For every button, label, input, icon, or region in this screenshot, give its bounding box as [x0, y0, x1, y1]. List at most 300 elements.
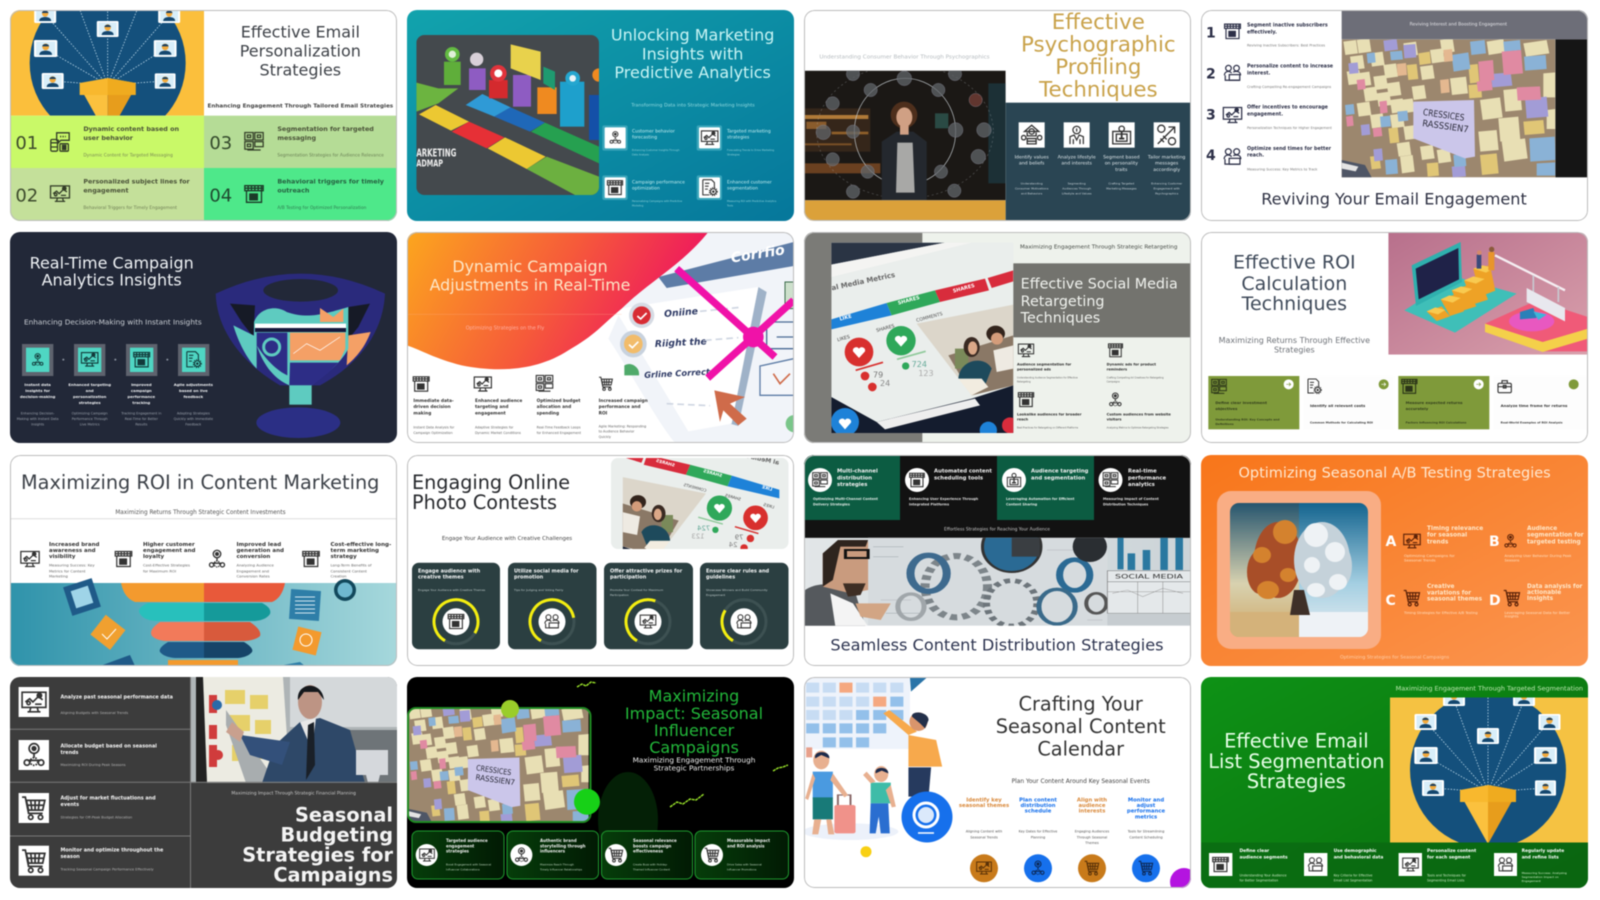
step 1: effectively. — [1247, 29, 1277, 35]
tile: audience targeting: Content Sharing — [1006, 502, 1038, 506]
title: Effective ROI — [1233, 252, 1356, 274]
panel: four steps: Psychographics — [1155, 192, 1179, 196]
insight 3: Results — [135, 422, 148, 426]
tile: automated scheduling: scheduling tools — [934, 475, 983, 481]
contest card 1 — [412, 563, 500, 652]
title: Seasonal Content — [996, 715, 1166, 738]
step: align interests: Align with — [1077, 797, 1107, 803]
dot: yellow — [860, 846, 872, 857]
step: plan distribution: Key Dates for Effective — [1019, 830, 1057, 834]
benefit 3: Engagement and — [236, 568, 270, 573]
card 2: Maximize Reach Through — [540, 862, 574, 866]
budget step 4 — [19, 846, 164, 876]
contest card 1: Engage audience with — [418, 569, 481, 575]
step 2: and behavioral data — [1334, 855, 1383, 861]
step 4: 4 — [1206, 148, 1216, 164]
card: relevant costs: Identify all relevant costs — [1310, 403, 1366, 408]
test B: segmentation for — [1527, 533, 1584, 539]
corner: purple — [1170, 868, 1198, 896]
panel: four steps: Tailor marketing — [1147, 154, 1185, 160]
benefit 2: Cost-Effective Strategies — [143, 563, 190, 568]
insight 4 — [174, 344, 214, 426]
subtitle: Transforming Data into Strategic Marketing Insights — [630, 103, 755, 109]
step: plan distribution — [1019, 797, 1057, 882]
feature: campaign performance optimization — [602, 175, 685, 207]
card 3: Create Buzz with Holiday- — [633, 862, 668, 866]
title: Predictive Analytics — [614, 63, 771, 82]
contest card 3: Offer attractive prizes for — [610, 569, 683, 575]
benefit 1: Measuring Success: Key — [49, 563, 95, 568]
step 3: Tools and Techniques for — [1426, 873, 1467, 877]
item 02: 02 — [15, 185, 38, 206]
image: half autumn half winter tree — [1217, 491, 1381, 649]
step 4: Engagement — [1522, 879, 1542, 883]
card: time frame: Real-World Examples of ROI Analysis — [1501, 420, 1563, 424]
item 1: Immediate data- — [413, 398, 454, 404]
step 4: Optimize send times for better — [1247, 146, 1332, 152]
image: woman with network rings — [804, 65, 1006, 200]
insight 4: feedback — [183, 394, 204, 399]
step 1 — [1206, 23, 1328, 48]
tactic: audience segmentation: Audience segmentation for — [1017, 363, 1072, 367]
title: Seamless Content Distribution Strategies — [830, 636, 1164, 655]
test B: Analyzing User Behavior During Peak — [1504, 554, 1572, 558]
step 3: Personalize content — [1427, 848, 1476, 854]
step 2: interest. — [1247, 70, 1271, 76]
panel: four steps: Segment based — [1103, 154, 1140, 160]
test B: B — [1489, 534, 1500, 550]
image: man in suit at poster — [190, 677, 398, 783]
subtitle: Strategic Partnerships — [654, 764, 735, 773]
test A: A — [1386, 534, 1396, 550]
item 1: Campaign Optimization — [413, 431, 453, 435]
budget step 2: Maximizing ROI During Peak Seasons — [60, 763, 126, 767]
benefit 1: Marketing — [49, 574, 69, 579]
benefit 1: visibility — [49, 554, 76, 560]
contest card 4: Ensure clear rules and — [706, 569, 770, 575]
title: Analytics Insights — [42, 270, 182, 289]
item 2 — [474, 377, 522, 435]
step 2: Use demographic — [1334, 848, 1377, 854]
tile: multi-channel: Optimizing Multi-Channel Content — [813, 497, 878, 501]
step: monitor metrics: Tools for Streamlining — [1127, 830, 1164, 834]
card: expected returns: Factors Influencing ROI Calculations — [1406, 420, 1467, 424]
item 03: messaging — [277, 134, 316, 142]
feature: customer behavior forecasting: forecasting — [632, 135, 657, 141]
step: monitor metrics — [1127, 797, 1165, 882]
card 3: Seasonal relevance — [633, 838, 677, 843]
budget step 3: Adjust for market fluctuations and — [60, 795, 156, 801]
card 4: and ROI analysis — [727, 843, 765, 848]
step 3: 3 — [1206, 108, 1216, 124]
test A: Timing relevance — [1427, 526, 1483, 532]
step: identify themes: Identify key — [966, 797, 1002, 803]
tactic: lookalike audiences: Lookalike audiences for broader — [1017, 412, 1082, 416]
step 1: for Better Segmentation — [1240, 878, 1278, 882]
step: identify themes: seasonal themes — [959, 803, 1009, 809]
item 1: making — [413, 410, 431, 416]
item 4: to Audience Behavior — [599, 430, 635, 434]
step 4 — [1494, 848, 1567, 883]
title: Strategies — [260, 60, 341, 79]
step 3 — [1206, 105, 1333, 130]
step 3 — [1399, 848, 1476, 882]
step: monitor metrics: adjust — [1137, 803, 1156, 809]
tactic: custom audiences: Custom audiences from website — [1107, 412, 1171, 416]
subtitle: Maximizing Impact Through Strategic Financial Planning — [231, 791, 356, 797]
title block: Effective Social Media — [1021, 277, 1178, 293]
title: Strategies — [1247, 770, 1346, 793]
card: define objectives: Understanding ROI: Key Concepts and — [1215, 418, 1280, 422]
item 01: Dynamic content based on — [83, 125, 179, 133]
panel: four steps: on personality — [1105, 161, 1138, 167]
benefit 4: Cost-effective long- — [330, 542, 391, 548]
panel: four steps: and beliefs — [1019, 161, 1045, 167]
card: define objectives: objectives — [1215, 406, 1238, 411]
item 1: Instant Data Analysis for — [413, 426, 455, 430]
step: align interests — [1075, 797, 1109, 882]
subtitle: Maximizing Engagement Through — [633, 755, 755, 764]
title: Profiling — [1055, 55, 1141, 80]
title: Effective Email — [241, 23, 360, 42]
test B: targeted testing — [1527, 539, 1581, 545]
band: gold footer — [804, 200, 1006, 221]
tile: audience targeting: Audience targeting — [1031, 469, 1089, 475]
feature: targeted marketing strategies: Strategies — [727, 152, 740, 156]
panel: Effective Email Personalization Strategies — [10, 0, 397, 221]
panel: Seasonal Budgeting Strategies for Campaigns — [10, 677, 398, 888]
item 2: targeting and — [475, 404, 508, 410]
panel: Maximizing Impact: Seasonal Influencer Campaigns — [407, 677, 794, 888]
subtitle: Maximizing Engagement Through Targeted Segmentation — [1396, 685, 1583, 693]
benefit 2: engagement and — [143, 548, 196, 554]
title: Effective — [1052, 10, 1145, 35]
subtitle: Optimizing Strategies on the Fly — [466, 325, 544, 331]
item 01: 01 — [15, 133, 38, 154]
contest card 2: promotion — [514, 575, 544, 581]
card: relevant costs — [1303, 376, 1394, 429]
title block: Techniques — [1020, 311, 1100, 327]
feature: campaign performance optimization: Modeling — [632, 203, 644, 207]
image: marketing roadmap: ADMAP — [416, 159, 443, 170]
subtitle: Engage Your Audience with Creative Challenges — [442, 536, 572, 542]
budget step 1: Aligning Budgets with Seasonal Trends — [60, 711, 128, 715]
title: Maximizing — [649, 687, 739, 706]
tile: audience targeting: Leveraging Automation for Efficient — [1006, 497, 1075, 501]
item 3: spending — [537, 410, 559, 416]
image: sticky-note wall in green frame — [407, 700, 600, 823]
budget step 1: Analyze past seasonal performance data — [60, 694, 173, 700]
item 04 — [204, 168, 397, 221]
step 3: Personalization Techniques for Higher Engagement — [1247, 126, 1333, 130]
item 3 — [536, 375, 582, 435]
step 4: Measuring Success: Analyzing — [1522, 871, 1567, 875]
insight 1: Insights — [31, 422, 44, 426]
item 03: 03 — [209, 133, 232, 154]
band: grey header: Reviving Interest and Boosting Engagement — [1410, 22, 1507, 28]
panel: four steps: Lifestyle and Values — [1062, 192, 1092, 196]
title: Engaging Online — [412, 471, 570, 494]
contest card 4: Showcase Winners and Build Community — [706, 588, 768, 592]
card 1: Boost Engagement with Seasonal — [446, 862, 491, 866]
item 4: performance and — [599, 404, 640, 410]
budget step 3: Strategies for Off-Peak Budget Allocation — [60, 815, 132, 819]
tactic: audience segmentation — [1017, 344, 1078, 384]
item 04: Behavioral triggers for timely — [277, 177, 385, 185]
card: time frame — [1493, 376, 1588, 429]
feature: enhanced customer segmentation: Enhanced customer — [727, 180, 772, 186]
step: plan distribution: distribution — [1020, 803, 1056, 809]
image: social screen — [611, 424, 789, 593]
test C: C — [1386, 593, 1396, 609]
insight 2: Enhanced targeting — [68, 382, 111, 387]
title: Dynamic Campaign — [452, 257, 608, 276]
tile: automated scheduling: Enhancing User Experience Through — [909, 497, 979, 501]
tactic: dynamic ads: Dynamic ads for product — [1107, 363, 1156, 367]
image: marketing roadmap: ARKETING — [416, 148, 456, 160]
feature: customer behavior forecasting: Customer behavior — [632, 129, 675, 135]
tactic: custom audiences: Analyzing Metrics to Optimize Retargeting Strategies — [1107, 426, 1169, 429]
title: Techniques — [1241, 293, 1347, 315]
card: expected returns: Measure expected returns — [1406, 400, 1463, 405]
item 4: Increased campaign — [599, 398, 648, 404]
tile: multi-channel — [804, 455, 900, 520]
insight 3: Improved — [131, 382, 152, 387]
step 1: audience segments — [1240, 855, 1288, 861]
feature: customer behavior forecasting: Data Analysis — [632, 152, 650, 156]
insight 3: tracking — [132, 400, 151, 405]
benefit 4: Long-Term Benefits of — [330, 563, 372, 568]
panel: four steps: Audiences Through — [1062, 187, 1091, 191]
step 2: Email List Segmentation — [1334, 878, 1372, 882]
feature: enhanced customer segmentation — [697, 175, 777, 207]
benefit 2 — [115, 542, 196, 573]
step 3: engagement. — [1247, 111, 1283, 117]
panel: Dynamic Campaign Adjustments in Real-Time — [407, 232, 803, 443]
test C: variations for — [1427, 590, 1471, 596]
card 2: storytelling through — [540, 843, 586, 848]
contest card 3: Promote Your Contest for Maximum — [610, 588, 663, 592]
step: plan distribution: Planning — [1031, 835, 1045, 839]
step: identify themes: Aligning Content with — [966, 830, 1002, 834]
benefit 4 — [303, 542, 391, 579]
test B — [1489, 526, 1584, 562]
insight 2: Live Metrics — [80, 422, 100, 426]
item 4: ROI — [599, 410, 608, 416]
panel: four steps: Enhancing Customer — [1151, 182, 1183, 186]
insight 4: Agile adjustments — [174, 382, 214, 387]
title: Seasonal — [295, 804, 393, 827]
tactic: audience segmentation: personalized ads — [1017, 368, 1051, 372]
title: Optimizing Seasonal A/B Testing Strategies — [1238, 466, 1551, 482]
tactic: lookalike audiences: Best Practices for Retargeting on Different Platforms — [1017, 426, 1079, 429]
band: black header — [804, 455, 1191, 538]
tile: multi-channel: Multi-channel — [837, 469, 878, 475]
test D: insights — [1527, 596, 1554, 602]
step 4: Measuring Success: Key Metrics to Track — [1247, 167, 1317, 171]
blob: orange-pink wave — [407, 232, 708, 369]
test D: Data analysis for — [1527, 584, 1583, 590]
test D: actionable — [1527, 590, 1561, 596]
budget step 1 — [19, 687, 173, 717]
card 3: effectiveness — [633, 849, 664, 854]
step: monitor metrics: performance — [1127, 809, 1165, 815]
test A: for seasonal — [1427, 533, 1467, 539]
tile: automated scheduling: Integrated Platforms — [909, 502, 949, 506]
title: Maximizing ROI in Content Marketing — [21, 471, 379, 494]
illustration: checklist screen: Grline Corrector — [644, 366, 721, 380]
tactic: audience segmentation: Retargeting — [1017, 381, 1031, 384]
title: Adjustments in Real-Time — [430, 276, 630, 295]
panel: four steps: Consumer Motivations — [1015, 187, 1049, 191]
insight 3: performance — [128, 394, 156, 399]
panel: four steps: traits — [1115, 167, 1128, 173]
item 2: Dynamic Market Conditions — [475, 431, 521, 435]
insight 4: Quickly with Immediate — [174, 417, 213, 421]
benefit 3: Conversion Rates — [236, 574, 270, 579]
illustration: checklist screen — [608, 232, 803, 443]
insight 1: decision-making — [20, 394, 56, 399]
step 2 — [1206, 64, 1334, 89]
step 1 — [1209, 848, 1288, 882]
illustration: checklist screen: Riight the — [655, 336, 707, 350]
contest card 4 — [700, 563, 788, 652]
benefit 1 — [21, 542, 100, 579]
test A: Optimizing Campaigns for — [1404, 553, 1455, 558]
item 4: Agile Marketing: Responding — [599, 425, 646, 429]
image: isometric growth stairs — [1388, 233, 1588, 355]
image: sticky-note wall — [1342, 38, 1588, 177]
tile: real-time analytics: Real-time — [1128, 469, 1157, 475]
decorative squiggles — [577, 682, 788, 807]
panel: Maximizing ROI in Content Marketing — [10, 455, 397, 666]
feature: campaign performance optimization: optimization — [632, 186, 660, 192]
item 04: outreach — [277, 186, 310, 194]
tile: real-time analytics: performance — [1128, 475, 1167, 481]
insight 1: Enhancing Decision- — [21, 412, 55, 416]
title: Influencer — [654, 721, 735, 740]
title: Calculation — [1241, 273, 1347, 295]
item 3: allocation and — [537, 404, 571, 410]
test A: Seasonal Trends — [1404, 557, 1436, 562]
budget step 3: events — [60, 802, 79, 808]
test C — [1386, 584, 1483, 615]
item 2: engagement — [475, 410, 506, 416]
benefit 1: Metrics for Content — [49, 568, 86, 573]
test C: seasonal themes — [1427, 597, 1483, 603]
step 4: and refine lists — [1522, 855, 1559, 861]
card 2: influencers — [540, 849, 566, 854]
test B: Seasons — [1504, 558, 1520, 562]
contest card 2 — [508, 563, 596, 652]
card 3 — [602, 831, 692, 879]
title: List Segmentation — [1208, 750, 1385, 773]
insight 4: Adapting Strategies — [177, 412, 210, 416]
panel: four steps: messages — [1155, 162, 1179, 167]
insight 3: campaign — [131, 388, 152, 393]
subtitle: Strategies — [1274, 345, 1315, 354]
insight 2: Performance Through — [72, 417, 108, 421]
contest card 1: Engage Your Audience with Creative Themes — [418, 588, 486, 592]
step 1: Segment inactive subscribers — [1247, 23, 1328, 29]
item 3: Optimized budget — [537, 398, 580, 404]
card 2: Authentic brand — [540, 838, 577, 843]
panel: four steps: Engagement with — [1153, 187, 1180, 191]
panel: Effective Psychographic Profiling Techniques — [804, 10, 1191, 221]
tactic: dynamic ads: Crafting Compelling Ad Creatives for Retargeting — [1107, 376, 1164, 379]
tile: real-time analytics: Measuring Impact of Content — [1103, 497, 1159, 501]
card 4: Measurable impact — [727, 838, 770, 843]
illustration: checklist screen: Corrfio — [730, 242, 786, 267]
benefit 2: for Maximum ROI — [143, 568, 176, 573]
panel: Crafting Your Seasonal Content Calendar — [803, 677, 1198, 896]
step 4: Regularly update — [1522, 848, 1564, 854]
benefit 3 — [210, 542, 284, 579]
card 1 — [412, 831, 504, 879]
panel: Real-Time Campaign Analytics Insights — [10, 232, 397, 443]
budget step 3 — [19, 793, 156, 823]
card: define objectives: Definitions — [1215, 422, 1234, 426]
step 1: 1 — [1206, 26, 1216, 42]
insight 3: Real-Time for Better — [125, 417, 159, 421]
step: align interests: interests — [1079, 809, 1105, 815]
tactic: dynamic ads: Campaigns — [1107, 381, 1120, 384]
title block — [1013, 263, 1191, 337]
step: monitor metrics: Content Scheduling — [1129, 835, 1163, 839]
illustration: checklist screen: Oniine — [664, 306, 698, 320]
test D: Insights — [1504, 615, 1519, 619]
tile: multi-channel: strategies — [837, 482, 867, 488]
tactic: audience segmentation: Understanding Audience Segmentation for Effective — [1017, 376, 1078, 379]
step: align interests: audience — [1078, 803, 1106, 809]
insight 3: Tracking Engagement in — [120, 412, 161, 416]
subtitle: Understanding Consumer Behavior Through Psychographics — [819, 54, 990, 60]
card: expected returns — [1398, 376, 1489, 429]
image: segmentation funnel — [1390, 681, 1588, 848]
test D — [1489, 584, 1583, 619]
panel: four steps: accordingly — [1153, 167, 1180, 173]
step: plan distribution: Plan content — [1019, 797, 1057, 803]
subtitle: Plan Your Content Around Key Seasonal Events — [1012, 779, 1150, 785]
step 4 — [1206, 146, 1332, 171]
benefit 1: awareness and — [49, 548, 96, 554]
tile: real-time analytics: analytics — [1128, 482, 1155, 488]
title: Strategies for — [242, 844, 393, 867]
item 04: 04 — [209, 185, 232, 206]
step 2: 2 — [1206, 67, 1216, 83]
title: Photo Contests — [412, 491, 557, 514]
subtitle: Enhancing Decision-Making with Instant Insights — [24, 318, 202, 327]
test B: Audience — [1527, 526, 1557, 532]
benefit 4: Consistent Content — [330, 568, 367, 573]
test A — [1386, 526, 1483, 562]
tile: multi-channel: Delivery Strategies — [813, 502, 850, 506]
title: Crafting Your — [1019, 693, 1143, 716]
benefit 4: strategy — [330, 554, 357, 560]
title: Personalization — [240, 42, 361, 61]
card: define objectives — [1208, 376, 1299, 429]
illustration: family with calendar — [803, 677, 942, 840]
tile: multi-channel: distribution — [837, 475, 872, 481]
step: align interests: Through Seasonal — [1076, 835, 1107, 839]
budget step 2 — [19, 740, 157, 770]
step: identify themes — [959, 797, 1009, 882]
insight 1: Making with Instant Data — [17, 417, 59, 421]
title: Campaigns — [273, 864, 393, 887]
title: Insights with — [642, 44, 743, 63]
card: define objectives: Define clear investment — [1215, 400, 1267, 405]
feature: enhanced customer segmentation: segmentation — [727, 186, 758, 192]
